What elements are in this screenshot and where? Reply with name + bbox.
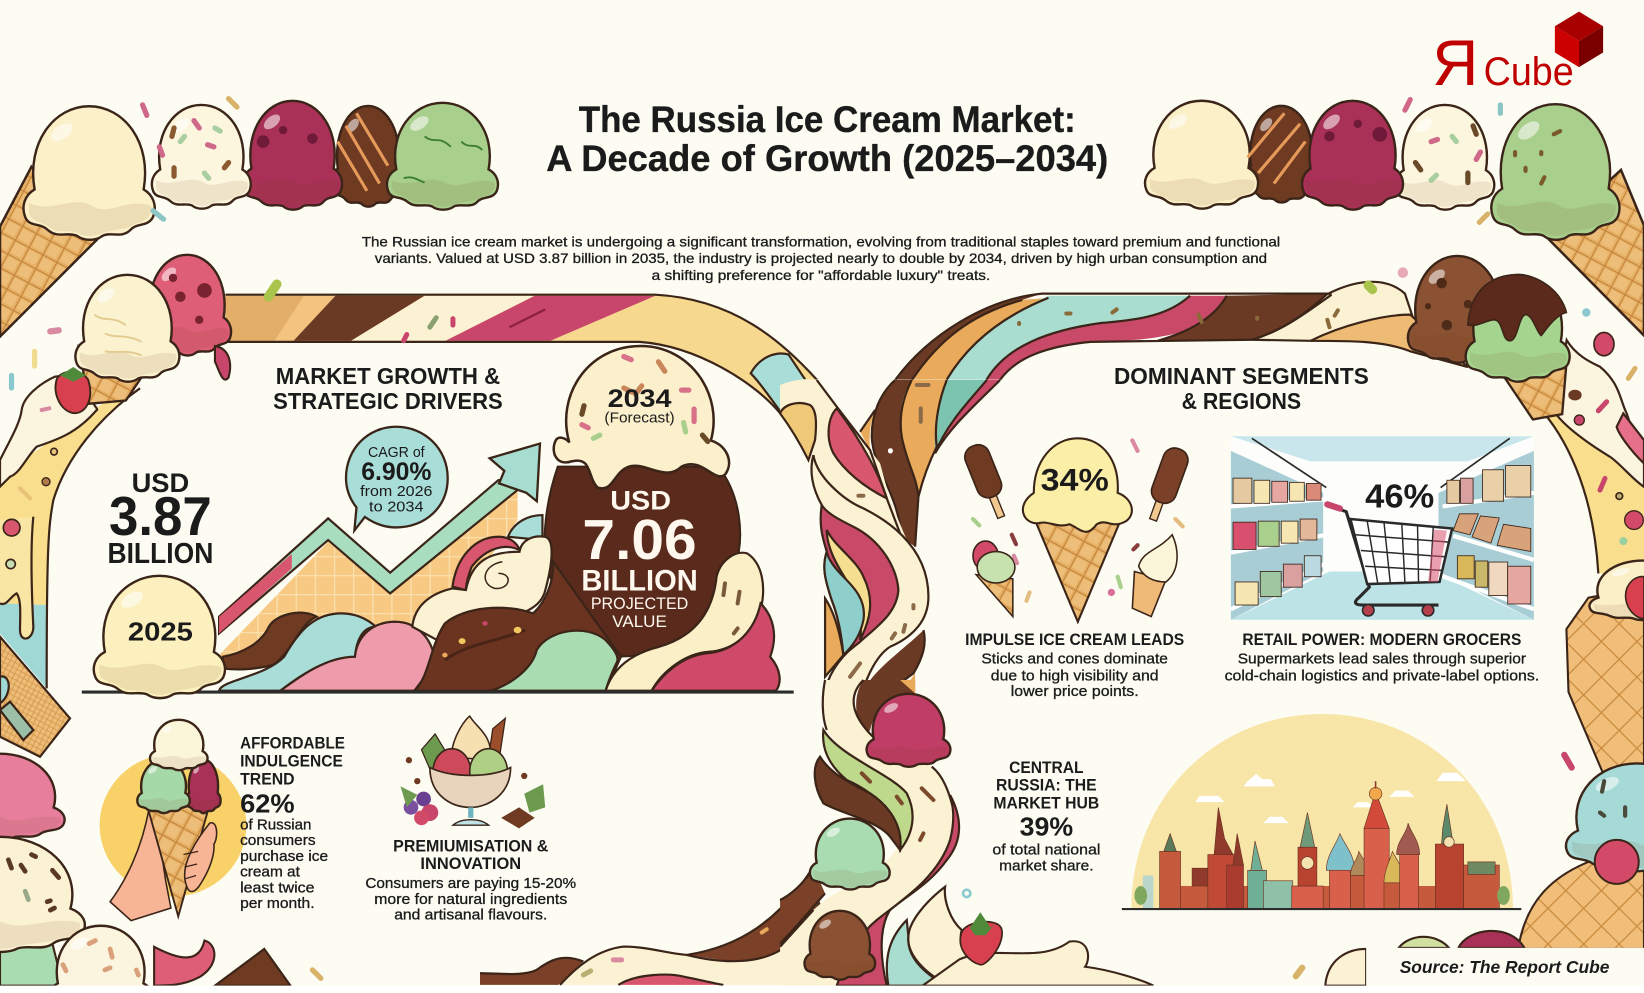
scoop: 2034 forecast: (Forecast) bbox=[604, 410, 675, 427]
text: affordable indulgence: least twice bbox=[240, 880, 315, 896]
value: USD 3.87 billion: 3.87 bbox=[109, 486, 212, 547]
icon: left top cone bbox=[0, 167, 100, 337]
cream swirl bbox=[412, 536, 552, 640]
heading: market growth bbox=[273, 363, 503, 414]
source box bbox=[1366, 948, 1644, 986]
icon: shopping cart bbox=[1327, 504, 1452, 616]
intro text: a shifting preference for "affordable luxury" treats. bbox=[652, 267, 990, 283]
callout: CAGR bubble: from 2026 bbox=[360, 483, 432, 500]
icon: right arch scoops with cone bbox=[1368, 256, 1591, 419]
icon: impulse ice cream cluster: 34% bbox=[1041, 463, 1109, 498]
callout: CAGR bubble: CAGR of bbox=[368, 444, 425, 461]
text: premiumisation: and artisanal flavours. bbox=[394, 908, 547, 924]
title bbox=[546, 99, 1108, 179]
cream right mound bbox=[606, 553, 763, 691]
text: retail power: RETAIL POWER: MODERN GROCERS bbox=[1242, 630, 1521, 649]
panel: left arch ribbon bbox=[225, 294, 823, 413]
text: premiumisation: PREMIUMISATION & bbox=[393, 837, 549, 855]
title: The Russia Ice Cream Market: bbox=[579, 99, 1076, 140]
sprinkles on chocolate bbox=[459, 638, 466, 644]
text: premiumisation bbox=[365, 837, 576, 924]
text: affordable indulgence: per month. bbox=[240, 896, 315, 912]
logo: Я bbox=[1432, 26, 1478, 99]
intro text: The Russian ice cream market is undergoing a significant transformation, evolving from traditional staples toward premium and functional bbox=[362, 233, 1280, 249]
text: central russia: RUSSIA: THE bbox=[996, 776, 1097, 795]
shelf products bbox=[1233, 466, 1531, 605]
logo: Cube bbox=[1484, 50, 1574, 94]
icon: logo cube bbox=[1555, 12, 1603, 67]
icon: hand holding cone bbox=[100, 720, 246, 921]
heading: dominant segments: DOMINANT SEGMENTS bbox=[1114, 363, 1369, 389]
intro text: variants. Valued at USD 3.87 billion in 2035, the industry is projected nearly to double by 2034, driven by high urban consumption and bbox=[375, 250, 1267, 266]
scoop: 2034 forecast bbox=[554, 346, 729, 488]
text: central russia: of total national bbox=[992, 843, 1100, 859]
text: central russia: CENTRAL bbox=[1009, 758, 1084, 777]
big chocolate dome bbox=[544, 467, 740, 656]
text: impulse: Sticks and cones dominate bbox=[981, 652, 1168, 668]
icon: right edge scoops and waffles bbox=[1296, 561, 1644, 986]
text: affordable indulgence: cream at bbox=[240, 865, 300, 881]
brown mound bbox=[223, 613, 317, 669]
icon: chocolate bar right bbox=[1142, 445, 1191, 524]
text: premiumisation: more for natural ingredients bbox=[374, 892, 567, 908]
baseline bbox=[82, 691, 794, 694]
heading: dominant segments: & REGIONS bbox=[1182, 388, 1301, 414]
bottom strip bbox=[0, 986, 1644, 993]
icon: impulse ice cream cluster bbox=[961, 438, 1191, 622]
arrow band pink start bbox=[219, 554, 292, 633]
value: USD 7.06 billion projected: 7.06 bbox=[582, 508, 697, 571]
teal mound bbox=[219, 613, 376, 691]
growth arrow head bbox=[490, 444, 540, 501]
text: central russia bbox=[992, 758, 1100, 874]
value: USD 7.06 billion projected: VALUE bbox=[612, 613, 667, 631]
logo bbox=[1432, 12, 1603, 99]
text: retail power: cold-chain logistics and private-label options. bbox=[1225, 669, 1539, 685]
text: affordable indulgence: AFFORDABLE bbox=[240, 734, 345, 753]
heading: market growth: STRATEGIC DRIVERS bbox=[273, 388, 503, 414]
icon: right top cone bbox=[1548, 170, 1644, 336]
icon: bottom left scoop stack bbox=[0, 754, 321, 993]
panel: bottom cream ribbon right bbox=[923, 941, 1153, 986]
scoop: 2025 bbox=[94, 576, 225, 698]
source box: Source: The Report Cube bbox=[1400, 957, 1609, 977]
chocolate mound bbox=[414, 560, 621, 691]
callout: CAGR bubble: 6.90% bbox=[361, 458, 431, 486]
text: affordable indulgence: of Russian bbox=[240, 817, 311, 833]
illustration: Moscow skyline bbox=[1122, 714, 1521, 909]
icon: sundae bbox=[401, 716, 545, 828]
panel: supermarket aisle: 46% bbox=[1365, 479, 1434, 516]
icon: soft serve bbox=[1132, 535, 1177, 617]
chart waffle area bbox=[219, 487, 518, 667]
text: central russia: 39% bbox=[1020, 812, 1073, 842]
text: affordable indulgence: 62% bbox=[240, 789, 295, 819]
text: impulse: lower price points. bbox=[1011, 684, 1139, 700]
text: affordable indulgence: TREND bbox=[240, 769, 295, 788]
panel: left side drip strip bbox=[0, 373, 140, 757]
icon: left arch scoops with cone and strawberry bbox=[12, 255, 277, 413]
value: USD 3.87 billion: BILLION bbox=[107, 537, 213, 569]
panel: central swirl lower bbox=[780, 680, 1000, 986]
text: retail power bbox=[1225, 630, 1539, 685]
intro text bbox=[362, 233, 1280, 283]
heading: dominant segments bbox=[1114, 363, 1369, 414]
value: USD 7.06 billion projected: BILLION bbox=[581, 564, 698, 597]
text: premiumisation: INNOVATION bbox=[420, 855, 521, 873]
scoop row: top left bbox=[23, 99, 498, 240]
pink arc bbox=[453, 537, 519, 590]
icon: main cone bbox=[1036, 522, 1120, 622]
value: USD 3.87 billion bbox=[107, 467, 213, 569]
pink mound bbox=[280, 622, 435, 691]
text: impulse bbox=[965, 630, 1184, 700]
icon: waffle piece left bbox=[0, 637, 70, 757]
text: premiumisation: Consumers are paying 15-20% bbox=[365, 876, 576, 892]
text: central russia: market share. bbox=[999, 858, 1094, 874]
callout: CAGR bubble bbox=[346, 427, 448, 531]
green mound bbox=[491, 631, 618, 691]
pink right mound bbox=[652, 603, 780, 691]
text: central russia: MARKET HUB bbox=[993, 793, 1099, 812]
icon: chocolate bar left bbox=[961, 441, 1013, 522]
callout: CAGR bubble: to 2034 bbox=[369, 499, 424, 516]
panel: supermarket aisle bbox=[1231, 436, 1534, 620]
value: USD 7.06 billion projected: PROJECTED bbox=[591, 595, 688, 613]
text: impulse: due to high visibility and bbox=[991, 669, 1159, 685]
panel: bottom flowing ribbon bbox=[480, 867, 820, 985]
text: affordable indulgence: INDULGENCE bbox=[240, 751, 343, 770]
heading: market growth: MARKET GROWTH & bbox=[276, 363, 500, 389]
icon: pink curl bbox=[154, 941, 214, 986]
title: A Decade of Growth (2025–2034) bbox=[546, 138, 1108, 179]
panel: central swirl upper bbox=[780, 379, 1000, 690]
scoops behind source bbox=[1458, 931, 1524, 948]
chart: growth mounds and arrow bbox=[219, 480, 780, 691]
icon: small cone bbox=[973, 541, 1015, 617]
icon: strawberry bbox=[960, 912, 1002, 965]
value: USD 7.06 billion projected bbox=[581, 485, 698, 631]
scoop row: top right bbox=[1145, 100, 1620, 240]
scoop: 2034 forecast: 2034 bbox=[608, 385, 672, 413]
text: affordable indulgence bbox=[240, 734, 345, 912]
icon: chocolate bar bbox=[215, 949, 290, 986]
value: USD 3.87 billion: USD bbox=[132, 467, 189, 498]
value: USD 7.06 billion projected: USD bbox=[610, 485, 671, 516]
text: affordable indulgence: consumers bbox=[240, 833, 316, 849]
text: affordable indulgence: purchase ice bbox=[240, 849, 328, 865]
teal arc bbox=[508, 515, 542, 540]
icon: main scoop bbox=[1023, 438, 1132, 532]
panel: right arch ribbon bbox=[895, 282, 1468, 380]
panel: right side strip bbox=[1538, 332, 1644, 573]
growth arrow band bbox=[219, 480, 530, 633]
icon: central swirl scoops bbox=[804, 694, 1002, 980]
text: impulse: IMPULSE ICE CREAM LEADS bbox=[965, 630, 1184, 649]
scoop: 2025: 2025 bbox=[128, 617, 193, 647]
text: retail power: Supermarkets lead sales through superior bbox=[1238, 652, 1526, 668]
